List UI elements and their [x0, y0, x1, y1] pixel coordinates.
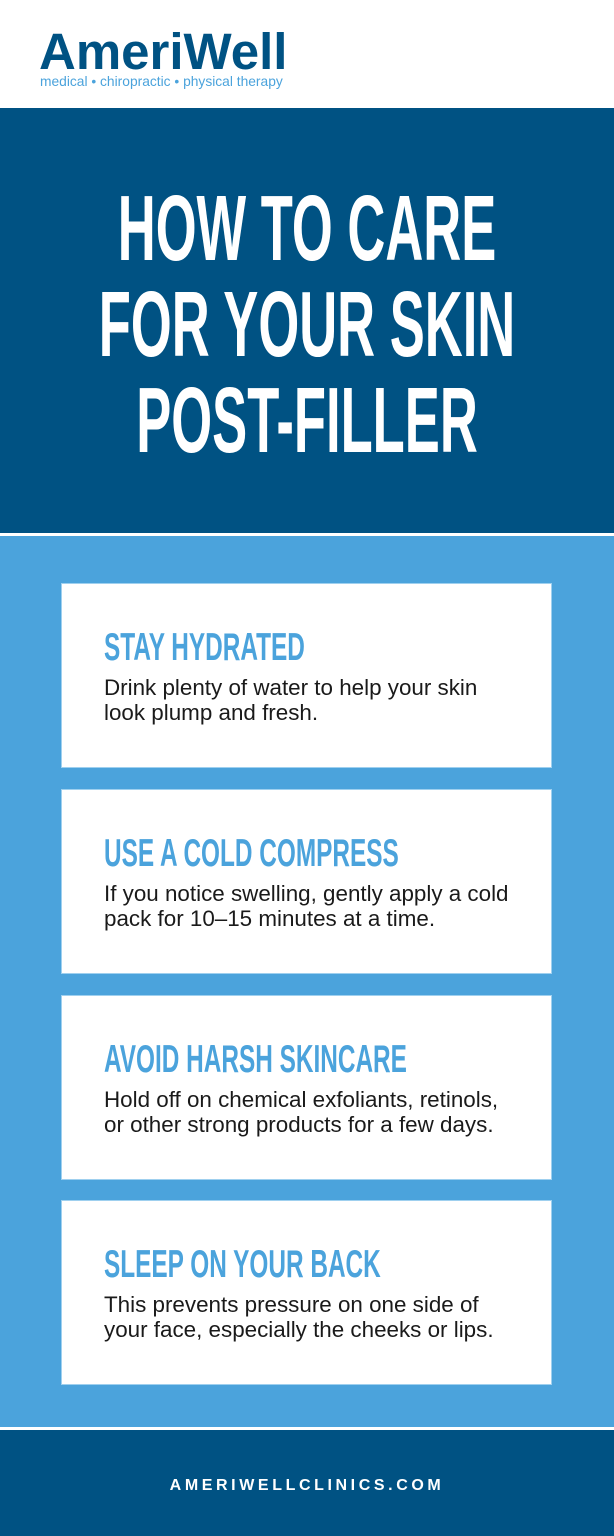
card: avoid harsh skincare: or other strong products for a few days. — [104, 1112, 494, 1137]
footer — [0, 1430, 614, 1536]
title: POST-FILLER — [136, 368, 478, 472]
logo tagline: medical • chiropractic • physical therapy — [40, 74, 283, 89]
title: FOR YOUR SKIN — [99, 272, 515, 376]
title band — [0, 108, 614, 533]
card: cold compress: If you notice swelling, gently apply a cold — [104, 881, 509, 906]
footer url: AMERIWELLCLINICS.COM — [170, 1477, 444, 1494]
card: avoid harsh skincare: Hold off on chemical exfoliants, retinols, — [104, 1087, 498, 1112]
card: avoid harsh skincare — [61, 995, 552, 1180]
card: stay hydrated: STAY HYDRATED — [104, 626, 305, 669]
card: sleep on your back — [61, 1200, 552, 1385]
logo — [39, 23, 287, 89]
logo wordmark: AmeriWell — [39, 23, 287, 80]
card: sleep on your back: SLEEP ON YOUR BACK — [104, 1243, 381, 1286]
card: stay hydrated — [61, 583, 552, 768]
card: sleep on your back: your face, especially the cheeks or lips. — [104, 1317, 494, 1342]
tips panel — [0, 536, 614, 1427]
card: avoid harsh skincare: AVOID HARSH SKINCARE — [104, 1038, 407, 1081]
card: sleep on your back: This prevents pressure on one side of — [104, 1292, 479, 1317]
card: cold compress: USE A COLD COMPRESS — [104, 832, 399, 875]
card: stay hydrated: look plump and fresh. — [104, 700, 318, 725]
title: HOW TO CARE — [118, 176, 496, 280]
card: cold compress: pack for 10–15 minutes at a time. — [104, 906, 435, 931]
title — [99, 176, 515, 472]
card: cold compress — [61, 789, 552, 974]
card: stay hydrated: Drink plenty of water to help your skin — [104, 675, 477, 700]
